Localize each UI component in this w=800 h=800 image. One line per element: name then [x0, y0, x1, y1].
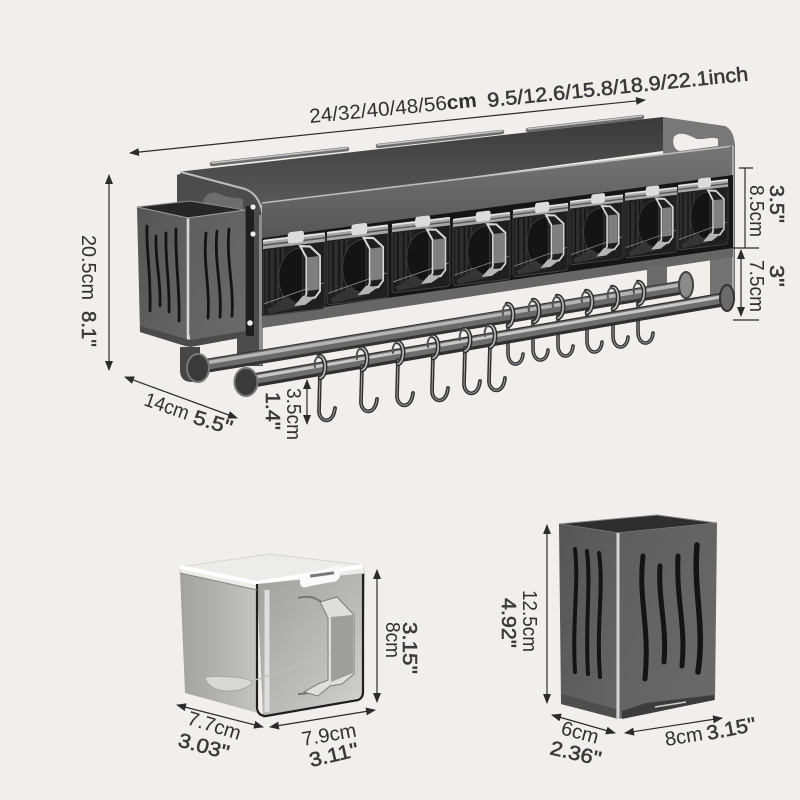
spice drawer detail — [180, 554, 365, 718]
label: 12.5cm: 12.5cm — [518, 590, 540, 652]
label: hook length in cm: 3.5cm — [282, 388, 304, 440]
top rail clips — [212, 116, 642, 164]
left end plate — [177, 172, 263, 366]
drawer lid — [180, 554, 365, 590]
drawer front face — [257, 573, 365, 718]
label: height in cm: 20.5cm — [77, 235, 99, 300]
label: 6cm: 6cm — [559, 718, 601, 749]
label: 2.36 inches: 2.36'' — [548, 737, 603, 771]
dimension: depth — [125, 377, 237, 439]
drawer handle — [298, 597, 354, 696]
label: 8.5cm: 8.5cm — [745, 185, 767, 237]
drip tray — [622, 695, 714, 719]
utensil holder on rack — [137, 201, 245, 347]
eight spice drawers — [263, 175, 728, 316]
label: hook length in inches: 1.4'' — [261, 392, 283, 430]
label: 3 inches: 3'' — [765, 265, 787, 287]
label: width in inches: 9.5/12.6/15.8/18.9/22.1inch — [486, 64, 749, 112]
front panel — [262, 146, 733, 238]
lower strip — [262, 248, 733, 328]
front rod — [234, 285, 734, 396]
label: 3.11 inches: 3.11'' — [307, 739, 361, 772]
front hooks — [315, 325, 505, 420]
dimension: holder width — [625, 714, 758, 751]
label: width in cm: 24/32/40/48/56cm — [308, 90, 478, 128]
right end wall with hanging slot — [663, 117, 735, 156]
drawer band — [262, 175, 733, 320]
label: 3.15 inches: 3.15'' — [705, 714, 758, 745]
dimension: width arrow and label — [130, 64, 749, 153]
holder left face — [559, 524, 618, 719]
holder rim — [559, 515, 717, 533]
drawer left face — [180, 573, 258, 713]
label: 7.7cm: 7.7cm — [185, 708, 244, 745]
rivets — [175, 169, 256, 326]
dimension: hook length — [261, 380, 307, 440]
shelf interior — [177, 117, 670, 205]
label: 8cm: 8cm — [663, 723, 704, 751]
label: 7.5cm: 7.5cm — [745, 260, 767, 312]
wave slots — [574, 545, 700, 679]
label: 4.92 inches: 4.92'' — [497, 598, 519, 648]
utensil holder detail — [559, 515, 717, 719]
dimension: holder height — [497, 525, 547, 703]
rear hooks — [508, 302, 653, 364]
holder right face — [618, 523, 717, 719]
label: 8cm: 8cm — [381, 622, 403, 658]
label: 3.5 inches: 3.5'' — [765, 185, 787, 223]
dimension: holder depth — [548, 715, 615, 771]
label: 3.15 inches: 3.15'' — [398, 622, 420, 674]
dimension: drawer height — [377, 570, 420, 702]
label: 7.9cm: 7.9cm — [300, 720, 358, 751]
label: depth in inches: 5.5'' — [191, 407, 235, 439]
scoop spoon — [205, 676, 252, 691]
label: height in inches: 8.1'' — [77, 311, 99, 347]
label: depth in cm: 14cm — [141, 389, 192, 425]
dimension: overall height — [77, 175, 109, 370]
rear rod rings — [503, 282, 644, 326]
dimension: drawer depth — [176, 705, 263, 764]
rear bracket — [647, 266, 667, 290]
right end plate — [710, 146, 735, 306]
lid tab — [300, 565, 340, 587]
label: 3.03 inches: 3.03'' — [176, 730, 232, 764]
rear rod — [180, 272, 693, 382]
dimension: drawer band height — [733, 168, 787, 320]
dimension: drawer width — [270, 710, 375, 772]
wall shelf rack — [175, 116, 735, 420]
